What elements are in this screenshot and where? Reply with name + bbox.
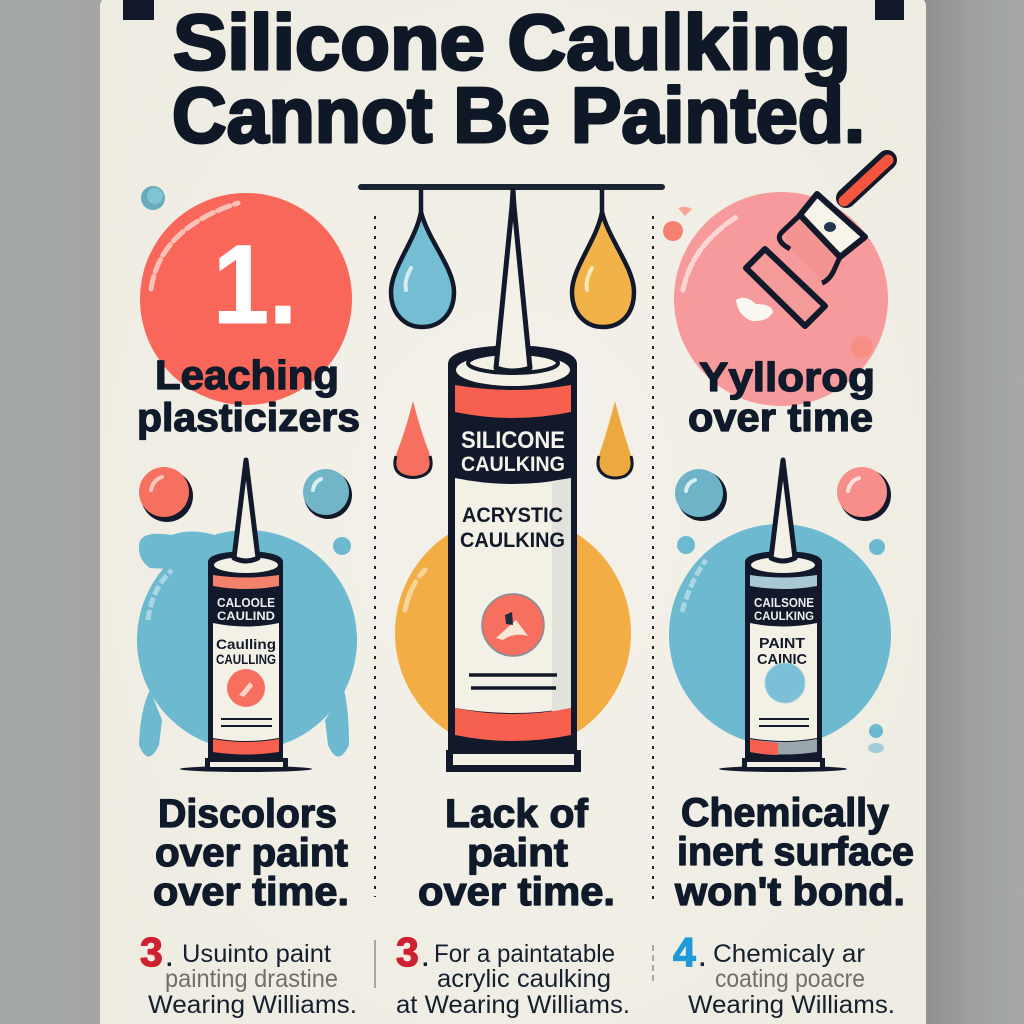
title: Cannot Be Painted. [172,71,865,159]
small red drop [395,401,431,478]
tube label: acrylic caulking: CAULKING [460,529,565,552]
base shadow [719,766,847,772]
small blue dot [141,186,165,210]
column text: chemically inert: won't bond. [674,870,905,914]
white paint blob [736,298,773,321]
caulk tube [205,460,288,770]
footer note 1: 3 [140,929,163,975]
tube label: acrylic caulking [460,504,565,552]
footer note 3: 4 [673,929,696,975]
tube label light [216,636,276,667]
small blue dot [333,537,351,555]
tube label dark: CAILSONE [754,595,814,610]
column dividers [375,216,653,988]
tube label dark [754,595,814,623]
footer note 1: painting drastine [165,965,338,993]
orange drop [572,190,634,327]
caulk tube [742,460,825,770]
footer note 2: at Wearing Williams. [396,991,630,1019]
column text: lack of paint [418,792,615,914]
footer note 3: . [699,945,706,972]
tube label light: CAULLING [216,651,276,667]
footer note 3: Wearing Williams. [688,991,895,1019]
hanging bar [358,184,665,190]
blue ball [303,469,352,519]
panel: yellowing over time [663,160,888,440]
title: Silicone Caulking [173,0,851,86]
white label [455,478,571,713]
footer note 1: Wearing Williams. [148,991,357,1019]
panel: right tube illustration [669,460,891,772]
nozzle [496,190,530,371]
hanging clip left [123,0,154,20]
footer note 1 [140,929,357,1019]
column text: chemically inert [674,791,914,914]
red ball [139,467,193,522]
blue seal [765,663,805,703]
column text: lack of paint: paint [467,831,568,875]
tube label: silicone caulking [461,427,565,476]
tube label: silicone caulking: SILICONE [461,427,565,454]
panel: leaching plasticizers [137,186,360,440]
blue ball [675,469,727,521]
red seal [227,669,265,707]
footer note 1: Usuinto paint [182,940,331,968]
footer note 2: . [422,945,429,972]
base shadow [180,766,312,772]
number 1: 1. [213,222,297,347]
heading: leaching plasticizers: plasticizers [137,396,360,440]
column text: lack of paint: over time. [418,870,615,914]
footer note 2: 3 [396,929,419,975]
footer note 3: Chemicaly ar [713,940,865,968]
tube label dark: CALOOLE [217,595,275,610]
caulk tube [446,190,581,772]
column text: discolors: Discolors [158,792,337,836]
highlight [151,203,238,289]
footer note 2 [396,929,630,1019]
footer note 2: For a paintatable [434,940,615,968]
tube label light: PAINT [759,635,805,652]
label lines [469,675,557,688]
circle highlight [405,570,425,610]
red seal [482,594,544,656]
heading: yellowing over time [688,354,875,440]
small dots [663,207,873,358]
highlight [683,216,738,290]
top red band [455,385,571,418]
blue splash [137,530,357,756]
icon: paint brush [746,160,888,326]
column text: chemically inert: Chemically [681,791,890,835]
hanging clip right [875,0,904,20]
tube label light: CAINIC [757,651,807,668]
heading: yellowing over time: Yyllorog [699,354,875,400]
column text: discolors: over paint [155,831,348,875]
tube label: acrylic caulking: ACRYSTIC [462,504,563,527]
tube label dark [217,595,275,623]
footer note 3: coating poacre [715,965,865,993]
tube label dark: CAULIND [217,609,275,623]
tube base [446,750,581,772]
panel: left tube illustration [137,460,357,772]
pink ball [837,467,891,521]
tube label dark: CAULKING [754,609,814,623]
red number circle [140,193,352,405]
roller pad [746,249,825,326]
column text: lack of paint: Lack of [445,792,589,836]
blue circle [669,524,891,746]
tube label light: Caulling [216,636,276,652]
heading: yellowing over time: over time [688,396,873,440]
blue drop [391,190,454,327]
footer note 1: . [166,945,173,972]
tube label light [757,635,807,668]
highlight [148,570,172,620]
highlight [682,560,706,612]
column text: discolors: over time. [153,870,349,914]
pink circle [674,192,888,406]
orange circle [395,515,631,751]
lower red band [455,708,571,741]
tube label: silicone caulking: CAULKING [461,453,565,476]
small orange drop [598,401,632,478]
heading: leaching plasticizers: Leaching [155,352,339,398]
footer note 2: acrylic caulking [437,965,611,993]
column text: discolors [153,792,349,914]
title [172,0,865,159]
heading: leaching plasticizers [137,352,360,440]
small dots [677,536,885,753]
panel: main tube [358,184,665,772]
footer note 3 [673,929,895,1019]
column text: chemically inert: inert surface [677,830,914,874]
